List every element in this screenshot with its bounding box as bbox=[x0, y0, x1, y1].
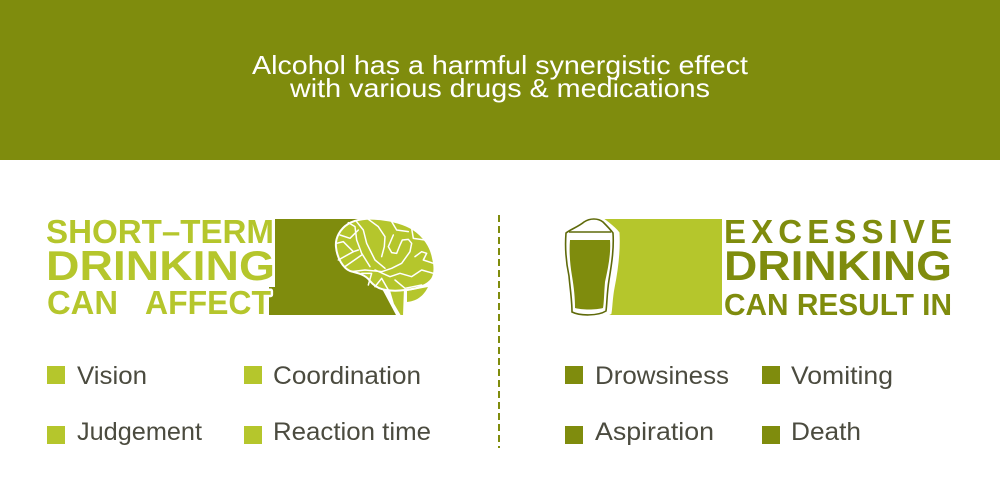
panel: excessive drinking bbox=[564, 213, 952, 322]
light green banner block bbox=[603, 219, 722, 315]
header text bbox=[252, 50, 749, 103]
bullet list: short-term effects: Judgement bbox=[77, 418, 202, 446]
panel: short-term drinking bbox=[46, 213, 434, 321]
bullet list: short-term effects bbox=[47, 362, 431, 446]
heading: short-term drinking can affect: AFFECT bbox=[145, 284, 271, 321]
bullet list: excessive drinking results: Aspiration bbox=[595, 418, 714, 446]
heading: excessive drinking can result in: DRINKING bbox=[724, 242, 952, 289]
heading: short-term drinking can affect: DRINKING bbox=[46, 242, 275, 289]
header banner bbox=[0, 0, 1000, 160]
bullet list: short-term effects: Vision bbox=[77, 362, 147, 390]
bullet list: excessive drinking results bbox=[565, 362, 893, 446]
heading: short-term drinking can affect: CAN bbox=[47, 284, 118, 321]
dark green banner block bbox=[269, 219, 396, 315]
header text: with various drugs & medications bbox=[289, 73, 710, 103]
icon: brain bbox=[336, 219, 434, 316]
heading: excessive drinking can result in bbox=[724, 213, 952, 322]
heading: excessive drinking can result in: EXCESSIVE bbox=[724, 213, 952, 250]
bullet list: short-term effects: Coordination bbox=[273, 362, 421, 390]
icon: beer glass bbox=[564, 218, 618, 318]
bullet list: excessive drinking results: Death bbox=[791, 418, 861, 446]
bullet list: excessive drinking results: Vomiting bbox=[791, 362, 893, 390]
heading: short-term drinking can affect bbox=[46, 213, 275, 321]
bullet list: short-term effects: Reaction time bbox=[273, 418, 431, 446]
heading: short-term drinking can affect: SHORT–TERM bbox=[46, 213, 274, 250]
bullet list: excessive drinking results: Drowsiness bbox=[595, 362, 729, 390]
heading: excessive drinking can result in: CAN RESULT IN bbox=[724, 287, 952, 322]
header text: Alcohol has a harmful synergistic effect bbox=[252, 50, 749, 80]
